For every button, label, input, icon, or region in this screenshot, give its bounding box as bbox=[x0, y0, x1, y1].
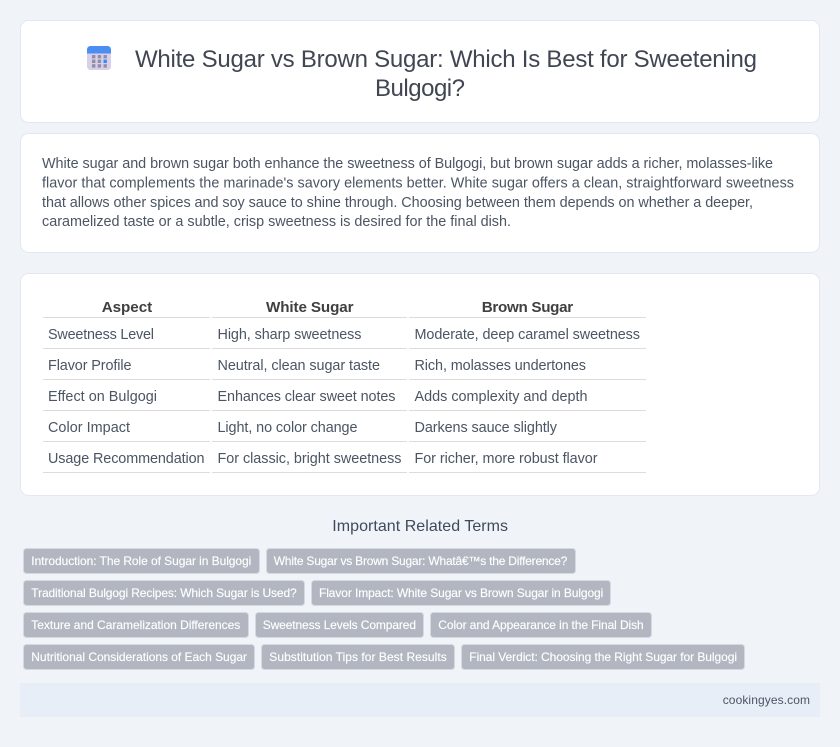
intro paragraph: flavor that complements the marinade's savory elements better. White sugar offers a clean, straightforward sweetness bbox=[42, 175, 794, 191]
row: usage recommendation bbox=[48, 451, 598, 467]
tag row 4: Final Verdict: Choosing the Right Sugar for Bulgogi bbox=[469, 650, 737, 664]
row: flavor profile bbox=[48, 358, 586, 374]
row: usage recommendation: Usage Recommendation bbox=[48, 451, 204, 467]
row: effect on bulgogi bbox=[48, 389, 588, 405]
tag row 2: Traditional Bulgogi Recipes: Which Sugar is Used? bbox=[31, 586, 297, 600]
panel: comparison table bbox=[20, 274, 820, 496]
intro paragraph: that allows other spices and soy sauce to shine through. Choosing between them depends on whether a deeper, bbox=[42, 195, 753, 211]
tag row 4 bbox=[24, 644, 744, 670]
row: sweetness level: Moderate, deep caramel sweetness bbox=[414, 327, 640, 343]
row: flavor profile: Rich, molasses undertones bbox=[414, 358, 586, 374]
row: color impact: Light, no color change bbox=[218, 420, 358, 436]
intro paragraph: caramelized taste or a subtle, crisp sweetness is desired for the final dish. bbox=[42, 214, 511, 230]
tag row 3: Color and Appearance in the Final Dish bbox=[438, 618, 644, 632]
footer bbox=[20, 683, 820, 717]
title: Bulgogi? bbox=[375, 75, 465, 102]
tag row 3 bbox=[24, 612, 652, 638]
row: color impact: Color Impact bbox=[48, 420, 130, 436]
row: effect on bulgogi: Adds complexity and depth bbox=[414, 389, 588, 405]
tag row 1 bbox=[24, 548, 576, 574]
panel: title header bbox=[20, 20, 820, 122]
row: usage recommendation: For richer, more robust flavor bbox=[414, 451, 598, 467]
intro paragraph: White sugar and brown sugar both enhance the sweetness of Bulgogi, but brown sugar adds a richer, molasses-like bbox=[42, 156, 773, 172]
footer: cookingyes.com bbox=[723, 693, 810, 707]
tag row 4: Nutritional Considerations of Each Sugar bbox=[31, 650, 247, 664]
tag row 3: Sweetness Levels Compared bbox=[263, 618, 416, 632]
row: color impact: Darkens sauce slightly bbox=[414, 420, 558, 436]
tag row 1: White Sugar vs Brown Sugar: Whatâ€™s the Difference? bbox=[274, 554, 568, 568]
row: sweetness level: High, sharp sweetness bbox=[218, 327, 362, 343]
table header row: Aspect bbox=[102, 299, 152, 316]
tag row 2: Flavor Impact: White Sugar vs Brown Sugar in Bulgogi bbox=[319, 586, 603, 600]
title: White Sugar vs Brown Sugar: Which Is Best for Sweetening bbox=[135, 46, 757, 73]
tag row 3: Texture and Caramelization Differences bbox=[31, 618, 240, 632]
tag row 2 bbox=[24, 580, 610, 606]
table header row bbox=[102, 299, 573, 316]
row: flavor profile: Neutral, clean sugar taste bbox=[218, 358, 380, 374]
row: flavor profile: Flavor Profile bbox=[48, 358, 132, 374]
tag row 1: Introduction: The Role of Sugar in Bulgogi bbox=[31, 554, 251, 568]
row: usage recommendation: For classic, bright sweetness bbox=[218, 451, 402, 467]
tag row 4: Substitution Tips for Best Results bbox=[269, 650, 447, 664]
row: effect on bulgogi: Effect on Bulgogi bbox=[48, 389, 157, 405]
row: color impact bbox=[48, 420, 558, 436]
heading: important related terms: Important Related Terms bbox=[332, 518, 508, 535]
row: sweetness level bbox=[48, 327, 640, 343]
icon: calendar bbox=[87, 46, 111, 70]
title bbox=[135, 46, 757, 102]
intro paragraph bbox=[42, 156, 794, 230]
panel: introduction text bbox=[20, 134, 820, 252]
row: effect on bulgogi: Enhances clear sweet notes bbox=[218, 389, 396, 405]
table header row: White Sugar bbox=[266, 299, 354, 316]
table header row: Brown Sugar bbox=[482, 299, 573, 316]
related term tags bbox=[24, 548, 744, 670]
row: sweetness level: Sweetness Level bbox=[48, 327, 154, 343]
